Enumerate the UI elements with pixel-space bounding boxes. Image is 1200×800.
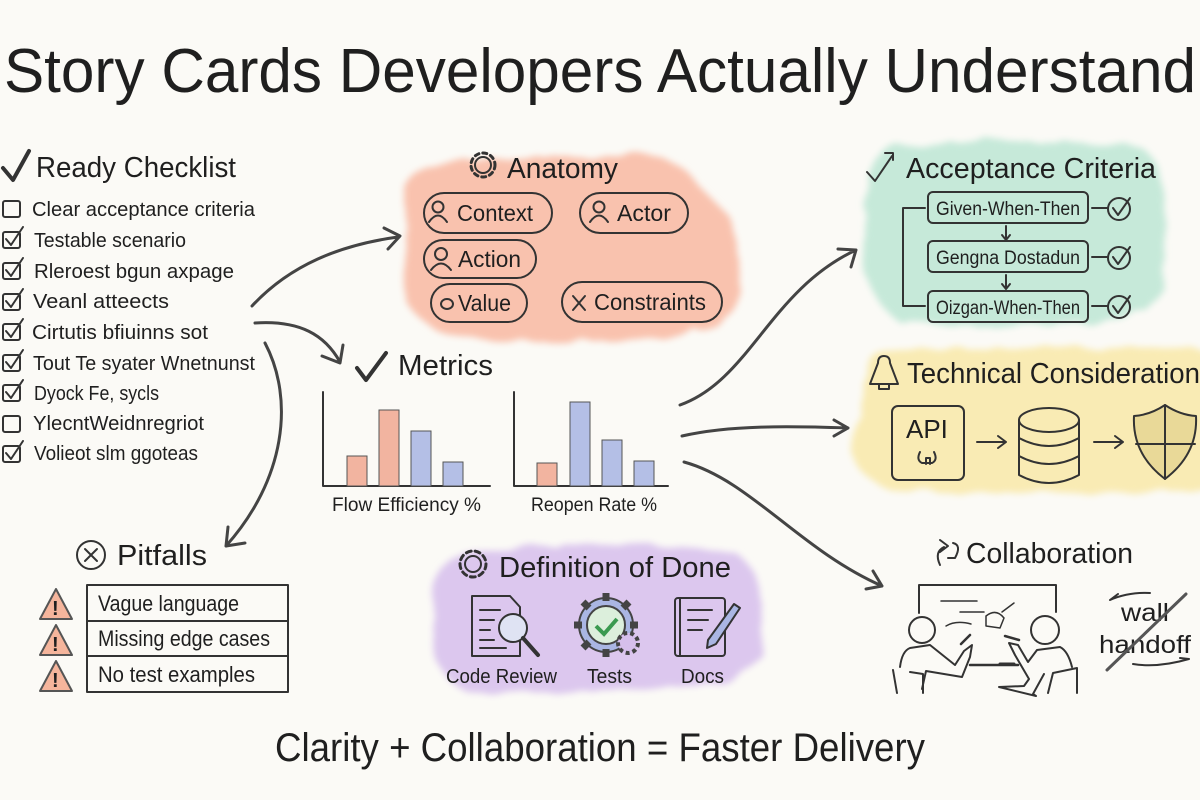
panel: metrics <box>323 350 668 516</box>
checklist items: Testable scenario <box>34 230 186 252</box>
heading: ready checklist: Ready Checklist <box>36 152 236 184</box>
icon: check arrow <box>867 153 893 181</box>
arrow: metrics to collaboration <box>684 462 882 589</box>
checklist items <box>3 199 256 465</box>
panel background <box>432 543 762 694</box>
icon: gear <box>471 153 495 177</box>
panel: pitfalls <box>40 540 288 692</box>
checklist items: YlecntWeidnregriot <box>33 413 204 435</box>
icon: code review <box>472 596 538 656</box>
bar chart: reopen rate: Reopen Rate % <box>531 495 657 516</box>
arrow: checklist to metrics <box>255 323 343 363</box>
icon: api box <box>892 406 964 480</box>
panel: definition of done <box>432 543 762 694</box>
label: Docs <box>681 666 724 688</box>
pill: action: Action <box>458 246 521 272</box>
label: Tests <box>587 666 632 688</box>
icon: shield <box>1134 405 1196 479</box>
panel: collaboration <box>893 538 1191 696</box>
icon: whiteboard meeting <box>893 585 1077 696</box>
icon: api box: API <box>906 414 948 444</box>
checklist items: Tout Te syater Wnetnunst <box>33 353 255 375</box>
warning icons <box>40 589 72 692</box>
pill: actor: Actor <box>617 200 671 226</box>
pitfall table: No test examples <box>98 662 255 687</box>
title: Story Cards Developers Actually Understand <box>4 37 1196 106</box>
icon: check <box>357 353 386 380</box>
panel background <box>864 140 1166 328</box>
panel: ready checklist <box>3 151 256 465</box>
heading: Collaboration <box>966 538 1133 570</box>
heading: Anatomy <box>507 153 618 185</box>
checklist items: Veanl atteects <box>33 291 169 313</box>
panel background <box>405 154 740 343</box>
warning icons: ! <box>52 598 59 620</box>
label: Code Review <box>446 666 558 688</box>
icon: docs book <box>675 598 740 656</box>
arrow <box>1094 436 1123 448</box>
icon: checkmark <box>3 151 29 180</box>
checklist items: Rleroest bgun axpage <box>34 261 234 283</box>
bar chart: flow efficiency: Flow Efficiency % <box>332 495 481 516</box>
arrow: metrics to acceptance <box>680 249 856 405</box>
heading: Acceptance Criteria <box>906 153 1157 185</box>
pill: constraints: Constraints <box>594 289 706 315</box>
pill: constraints <box>562 282 722 322</box>
icon: tests gear <box>574 593 638 657</box>
crossed out wall handoff: wall <box>1120 599 1169 627</box>
crossed out wall handoff: handoff <box>1099 631 1191 659</box>
checklist items: Volieot slm ggoteas <box>34 443 198 465</box>
pill: value <box>431 284 527 322</box>
icon: bell <box>870 356 898 389</box>
checklist items: Cirtutis bfiuinns sot <box>32 322 208 344</box>
flow: Given-When-Then <box>936 199 1080 220</box>
icon: database <box>1019 408 1079 483</box>
checklist items: Clear acceptance criteria <box>32 199 256 221</box>
warning icons: ! <box>52 634 59 656</box>
panel: anatomy <box>405 153 740 343</box>
pitfall table: Missing edge cases <box>98 626 270 651</box>
pitfall table: Vague language <box>98 591 239 616</box>
heading: Definition of Done <box>499 552 731 584</box>
pill: context <box>424 193 552 233</box>
crossed out wall handoff <box>1099 593 1191 670</box>
arrow: checklist to pitfalls <box>226 343 281 546</box>
pill: actor <box>580 193 688 233</box>
heading: Metrics <box>398 350 493 382</box>
arrow: checklist to anatomy <box>252 228 400 306</box>
icon: gear outline <box>460 551 486 577</box>
bar chart: reopen rate <box>514 392 668 516</box>
flow: Oizgan-When-Then <box>936 298 1080 319</box>
panel: technical consideration <box>850 347 1200 494</box>
heading: Pitfalls <box>117 540 207 572</box>
flow: Gengna Dostadun <box>936 248 1080 269</box>
bar chart: flow efficiency <box>323 392 490 516</box>
flow <box>903 192 1130 322</box>
icon: cycle arrows <box>938 540 958 565</box>
tagline: Clarity + Collaboration = Faster Delivery <box>275 726 925 770</box>
arrow: metrics to technical <box>682 420 848 436</box>
warning icons: ! <box>52 670 59 692</box>
pill: value: Value <box>458 290 511 316</box>
pill: action <box>424 240 536 278</box>
arrow <box>977 436 1006 448</box>
checklist items: Dyock Fe, sycls <box>34 383 159 405</box>
icon: x circle <box>77 541 105 569</box>
panel background <box>850 347 1200 494</box>
panel: acceptance criteria <box>864 140 1166 328</box>
pill: context: Context <box>457 200 534 226</box>
pitfall table <box>87 585 288 692</box>
